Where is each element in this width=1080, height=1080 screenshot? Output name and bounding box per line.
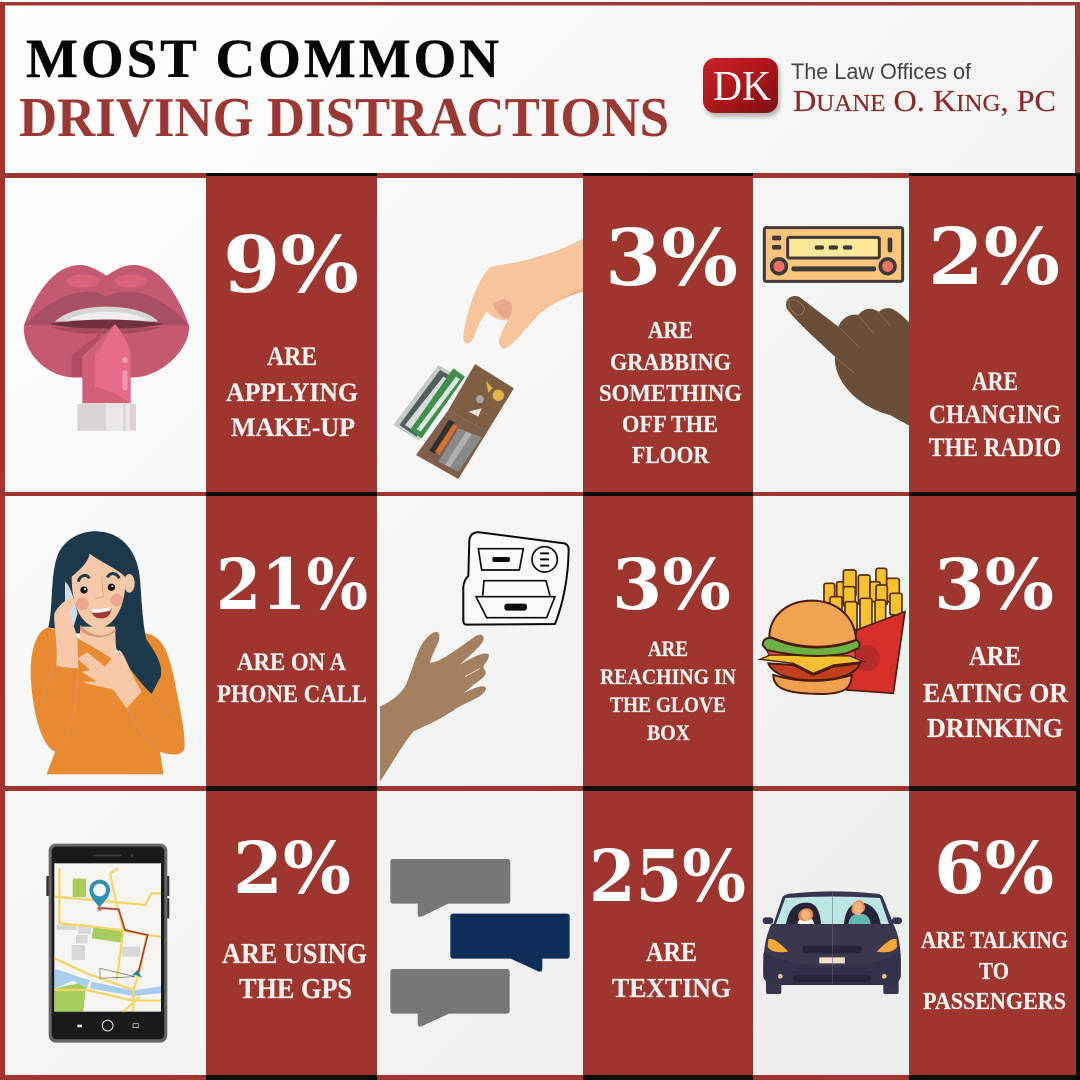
label: are applying make-up: ARE [267, 342, 317, 371]
stat: 21%: 21% [216, 543, 368, 626]
logo: law offices of Duane O. King: DK [713, 64, 771, 110]
label: are on a phone call [217, 649, 367, 708]
icon: lips and lipstick [24, 265, 189, 431]
stat: 9%: 9% [223, 220, 359, 311]
panel: header [19, 28, 1056, 149]
label: are applying make-up [226, 342, 358, 442]
icon: smartphone with map [46, 844, 169, 1043]
label: are reaching in the glove box: THE GLOVE [610, 692, 726, 717]
panel: grabbing something off the floor [393, 178, 753, 494]
label: are reaching in the glove box [600, 636, 736, 745]
stat: 2%: 2% [928, 212, 1060, 303]
label: are changing the radio: THE RADIO [929, 433, 1061, 462]
label: are talking to passengers [921, 928, 1068, 1015]
label: are using the GPS [222, 939, 367, 1005]
stat: 25%: 25% [589, 834, 746, 918]
panel: changing the radio [764, 178, 1076, 494]
icon: chat bubbles [390, 859, 570, 1027]
panel: using the GPS [46, 791, 377, 1075]
stat: 3%: 3% [612, 543, 731, 626]
icon: woman on the phone [31, 531, 185, 774]
stat: 6%: 6% [934, 826, 1054, 910]
stat: 3%: 3% [934, 543, 1054, 626]
label: are grabbing something off the floor: GRABBING [610, 350, 731, 376]
label: are changing the radio: ARE [972, 367, 1018, 396]
label: are applying make-up: APPLYING [226, 378, 358, 407]
label: are eating or drinking [923, 641, 1068, 743]
logo: law offices of Duane O. King: The Law Offices of [791, 59, 972, 84]
logo: law offices of Duane O. King [703, 58, 1056, 118]
label: are applying make-up: MAKE-UP [231, 413, 355, 442]
label: are grabbing something off the floor: ARE [648, 318, 693, 344]
panel: talking to passengers [763, 791, 1076, 1075]
title line: most common: MOST COMMON [26, 28, 499, 89]
label: are grabbing something off the floor: SOMETHING [599, 381, 742, 407]
panel: reaching in the glove box [380, 496, 753, 788]
label: are eating or drinking: DRINKING [927, 713, 1063, 743]
panel: eating or drinking [760, 496, 1076, 788]
label: are grabbing something off the floor: FLOOR [632, 443, 710, 469]
label: are reaching in the glove box: BOX [647, 720, 690, 745]
label: are texting [612, 937, 731, 1003]
icon: car radio and pointing finger [764, 228, 910, 426]
panel: texting [390, 791, 753, 1075]
icon: hand reaching for wallet [393, 239, 583, 479]
label: are texting: TEXTING [612, 973, 731, 1003]
panel: applying make-up [24, 178, 377, 494]
label: are talking to passengers: TO [979, 959, 1009, 985]
icon: burger and fries [760, 568, 905, 694]
icon: glove box and reaching hand [380, 532, 569, 782]
label: are on a phone call: PHONE CALL [217, 681, 367, 708]
label: are using the GPS: THE GPS [239, 974, 352, 1005]
label: are texting: ARE [646, 937, 697, 967]
label: are grabbing something off the floor [599, 318, 742, 469]
title line: driving distractions: DRIVING DISTRACTIONS [19, 87, 669, 149]
label: are changing the radio [929, 367, 1061, 462]
label: are reaching in the glove box: ARE [648, 636, 688, 661]
icon: car with passengers [763, 891, 902, 994]
label: are talking to passengers: PASSENGERS [923, 989, 1066, 1015]
label: are changing the radio: CHANGING [929, 400, 1061, 429]
panel: phone call [31, 496, 377, 788]
stat: 3%: 3% [605, 213, 738, 304]
label: are using the GPS: ARE USING [222, 939, 367, 970]
label: are on a phone call: ARE ON A [237, 649, 346, 676]
label: are reaching in the glove box: REACHING IN [600, 664, 736, 689]
label: are eating or drinking: ARE [969, 641, 1021, 671]
stat: 2%: 2% [233, 826, 351, 910]
logo: law offices of Duane O. King: DUANE O. KING, PC [793, 83, 1056, 118]
label: are grabbing something off the floor: OFF THE [622, 412, 718, 438]
label: are eating or drinking: EATING OR [923, 678, 1068, 708]
